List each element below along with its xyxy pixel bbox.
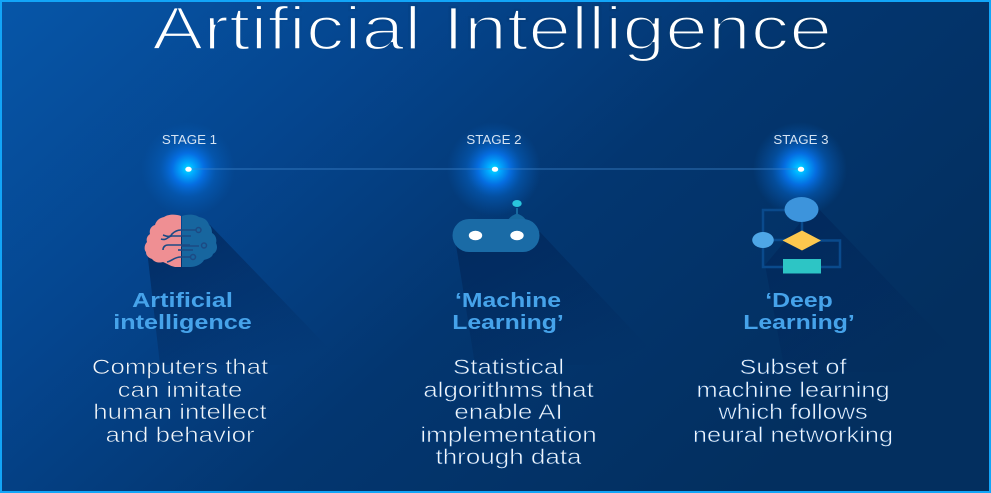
stage 2 glow xyxy=(447,122,541,216)
column 1 description: can imitate xyxy=(118,379,242,402)
column 3 heading: ‘Deep xyxy=(765,289,833,311)
right eye xyxy=(510,231,524,240)
top circle xyxy=(784,197,818,222)
column 3 description: neural networking xyxy=(693,423,893,447)
column 1 description: and behavior xyxy=(105,424,255,447)
connector line xyxy=(188,168,800,170)
icon: brain xyxy=(145,215,217,267)
process rectangle xyxy=(783,259,821,274)
column 2 heading: Learning’ xyxy=(452,311,564,333)
stage 1 glow xyxy=(141,122,235,216)
antenna xyxy=(508,208,526,220)
column 2 description: enable AI xyxy=(454,400,563,424)
circuit nodes xyxy=(190,228,206,260)
left hemisphere xyxy=(145,215,181,267)
long shadow: flowchart xyxy=(765,205,975,372)
left circle xyxy=(752,232,774,248)
stage 1 dot xyxy=(185,167,192,172)
column 2 description: through data xyxy=(435,445,582,469)
column 2 description: Statistical xyxy=(453,355,564,379)
column 2 description: implementation xyxy=(420,423,597,447)
left eye xyxy=(469,231,482,240)
decision diamond xyxy=(782,230,821,250)
icon: flowchart xyxy=(752,197,840,274)
stage 1 label: STAGE 1 xyxy=(162,132,217,147)
column 3 description: Subset of xyxy=(739,355,847,379)
column 3 description: which follows xyxy=(717,400,868,424)
antenna tip xyxy=(512,200,522,207)
column 3 heading: Learning’ xyxy=(743,311,855,333)
stage 2 label: STAGE 2 xyxy=(466,132,522,147)
stage 3 label: STAGE 3 xyxy=(773,132,829,147)
column 1 description: human intellect xyxy=(93,401,267,424)
stage 3 glow xyxy=(753,122,847,216)
column 1 description: Computers that xyxy=(92,356,269,379)
robot head xyxy=(452,219,540,252)
long shadow: robot xyxy=(456,232,665,365)
column 2 heading: ‘Machine xyxy=(455,289,561,311)
connectors xyxy=(763,210,840,267)
stage 2 dot xyxy=(492,167,498,172)
stage 3 dot xyxy=(798,167,804,172)
column 2 description: algorithms that xyxy=(423,378,594,402)
column 3 description: machine learning xyxy=(696,378,890,402)
column 1 heading: intelligence xyxy=(113,311,252,333)
timeline xyxy=(141,122,847,216)
right hemisphere xyxy=(182,215,217,267)
circuit traces xyxy=(161,230,199,262)
long shadow: brain xyxy=(147,225,345,365)
icon: robot xyxy=(452,200,540,252)
column 1 heading: Artificial xyxy=(132,289,233,311)
